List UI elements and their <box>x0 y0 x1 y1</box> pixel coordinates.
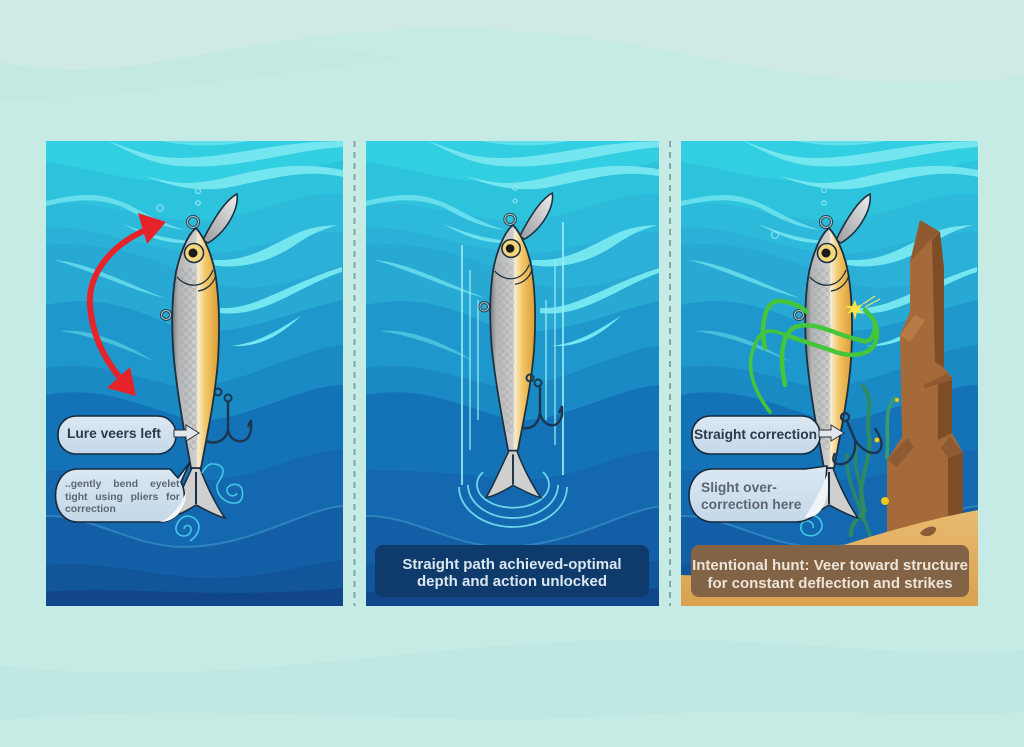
callout: slight over-correction <box>689 466 828 522</box>
spark <box>845 296 880 320</box>
caption 3 <box>691 545 969 597</box>
caption 2 <box>375 545 649 597</box>
callout: slight over-correction: correction here <box>701 497 802 512</box>
caption 2: Straight path achieved-optimal <box>402 556 622 573</box>
callout: lure veers left: Lure veers left <box>67 426 161 441</box>
lure 2 <box>480 193 553 498</box>
treble hook 3 <box>833 413 881 464</box>
panel 2: straight path <box>366 141 663 606</box>
gold beads <box>874 398 899 505</box>
seaweed dark <box>847 386 895 535</box>
callout: straight correction: Straight correction <box>694 427 817 442</box>
ripples <box>459 472 567 527</box>
speed lines <box>462 222 563 485</box>
water background 1 <box>46 141 343 606</box>
callout: lure veers left <box>58 416 176 454</box>
treble hook 1 <box>206 388 251 443</box>
red double arrow <box>90 213 166 396</box>
callout: bend eyelet: ..gently bend eyelet <box>65 479 180 490</box>
callout: bend eyelet: correction <box>65 504 116 515</box>
rock formation <box>887 220 963 535</box>
arrow to lure 3 <box>819 425 844 441</box>
divider 2 <box>669 141 671 606</box>
water background 2 <box>366 141 663 606</box>
caption 2: depth and action unlocked <box>417 573 607 590</box>
divider 1 <box>354 141 356 606</box>
lure 3 <box>794 194 870 518</box>
arrow to lure 1 <box>174 425 199 441</box>
water background 3 <box>681 141 978 606</box>
callout: bend eyelet <box>56 462 190 522</box>
callout: bend eyelet: tight using pliers for <box>65 492 180 503</box>
sand <box>681 510 978 606</box>
green weed tangle <box>751 301 877 412</box>
panel 3: intentional hunt <box>681 141 978 606</box>
bubbles 1 <box>157 188 200 211</box>
callout: slight over-correction: Slight over- <box>701 480 777 495</box>
bubbles 3 <box>772 188 826 238</box>
treble hook 2 <box>523 374 562 428</box>
swirl 3 <box>801 515 822 536</box>
panel 1: lure veers left <box>46 141 343 606</box>
callout: straight correction <box>692 416 820 454</box>
caption 3: Intentional hunt: Veer toward structure <box>692 557 968 574</box>
caption 3: for constant deflection and strikes <box>707 575 953 592</box>
swirl 1 <box>202 464 243 503</box>
swirl 2 <box>176 516 199 541</box>
lure 1 <box>162 194 237 518</box>
pebble <box>920 526 936 536</box>
bubbles 2 <box>513 186 517 203</box>
